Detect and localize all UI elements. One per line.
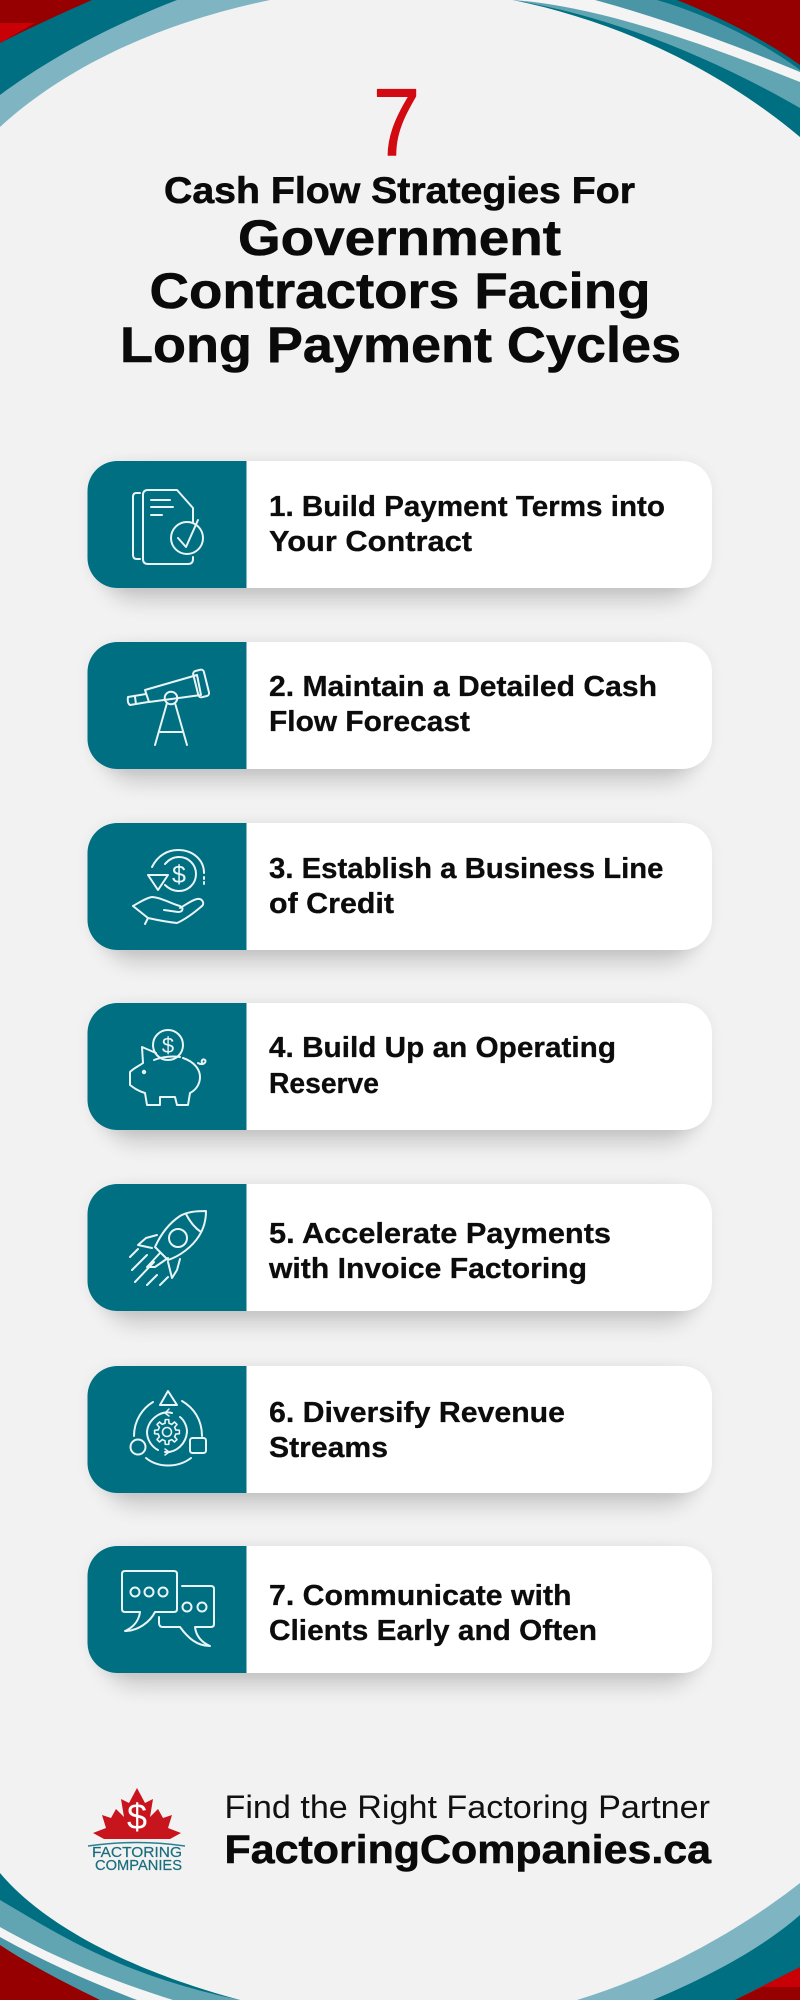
strategy 5 text <box>268 1218 611 1285</box>
icon: hand with dollar and return arrow <box>133 850 204 924</box>
title line 4: Long Payment Cycles <box>120 317 681 373</box>
icon: contract document with check <box>133 490 203 564</box>
title line 1: Cash Flow Strategies For <box>164 170 635 211</box>
panel: strategy 4 <box>88 1003 712 1142</box>
strategy 1 text: 1. Build Payment Terms into <box>269 491 665 523</box>
logo wordmark: FACTORING <box>92 1845 182 1861</box>
strategy 5 text: with Invoice Factoring <box>268 1253 587 1285</box>
large red numeral 7: 7 <box>373 69 420 176</box>
strategy 2 text <box>269 671 657 738</box>
panel: strategy 2 <box>88 642 712 781</box>
strategy 7 text <box>269 1580 597 1647</box>
logo arc <box>88 1842 185 1846</box>
icon: rocket <box>130 1211 206 1285</box>
icon: piggy bank with coin: $ <box>162 1033 174 1058</box>
logo wordmark: COMPANIES <box>95 1858 182 1874</box>
panel: strategy 6 <box>88 1366 712 1505</box>
title line 3: Contractors Facing <box>150 263 650 319</box>
icon: telescope <box>128 669 210 745</box>
maple leaf <box>93 1788 181 1839</box>
strategy 3 text: 3. Establish a Business Line <box>269 853 664 885</box>
strategy 6 text: 6. Diversify Revenue <box>269 1397 565 1429</box>
footer call to action: FactoringCompanies.ca <box>224 1828 712 1872</box>
strategy 3 text <box>269 853 664 920</box>
panel: strategy 5 <box>88 1184 712 1323</box>
footer call to action <box>224 1789 712 1872</box>
strategy 2 text: Flow Forecast <box>269 706 470 738</box>
strategy 4 text <box>269 1032 616 1100</box>
icon: hand with dollar and return arrow: $ <box>172 861 186 889</box>
title <box>120 69 681 373</box>
strategy 1 text <box>269 491 665 558</box>
strategy 7 text: Clients Early and Often <box>269 1615 597 1647</box>
strategy 4 text: 4. Build Up an Operating <box>269 1032 616 1064</box>
strategy 7 text: 7. Communicate with <box>269 1580 572 1612</box>
strategy 3 text: of Credit <box>269 888 394 920</box>
dollar sign: $ <box>127 1796 147 1837</box>
bottom-left corner swoosh <box>0 1873 240 2000</box>
strategy 6 text <box>269 1397 565 1464</box>
top-left corner swoosh <box>0 0 270 127</box>
strategy 6 text: Streams <box>269 1432 388 1464</box>
strategy 5 text: 5. Accelerate Payments <box>269 1218 611 1250</box>
logo: Factoring Companies maple leaf <box>88 1788 185 1874</box>
panel: strategy 1 <box>88 461 712 600</box>
strategy 1 text: Your Contract <box>269 526 472 558</box>
logo wordmark <box>92 1845 182 1874</box>
icon: speech bubbles <box>122 1571 214 1646</box>
icon: piggy bank with coin <box>130 1030 206 1105</box>
footer call to action: Find the Right Factoring Partner <box>224 1789 710 1825</box>
panel: strategy 3 <box>88 823 712 962</box>
icon: gear in cycle of shapes <box>130 1391 206 1466</box>
bottom-right corner swoosh <box>577 1883 800 2000</box>
panel: strategy 7 <box>88 1546 712 1685</box>
strategy 2 text: 2. Maintain a Detailed Cash <box>269 671 657 703</box>
top-right corner swoosh <box>513 0 800 137</box>
title line 2: Government <box>238 210 561 266</box>
strategy 4 text: Reserve <box>269 1068 379 1100</box>
